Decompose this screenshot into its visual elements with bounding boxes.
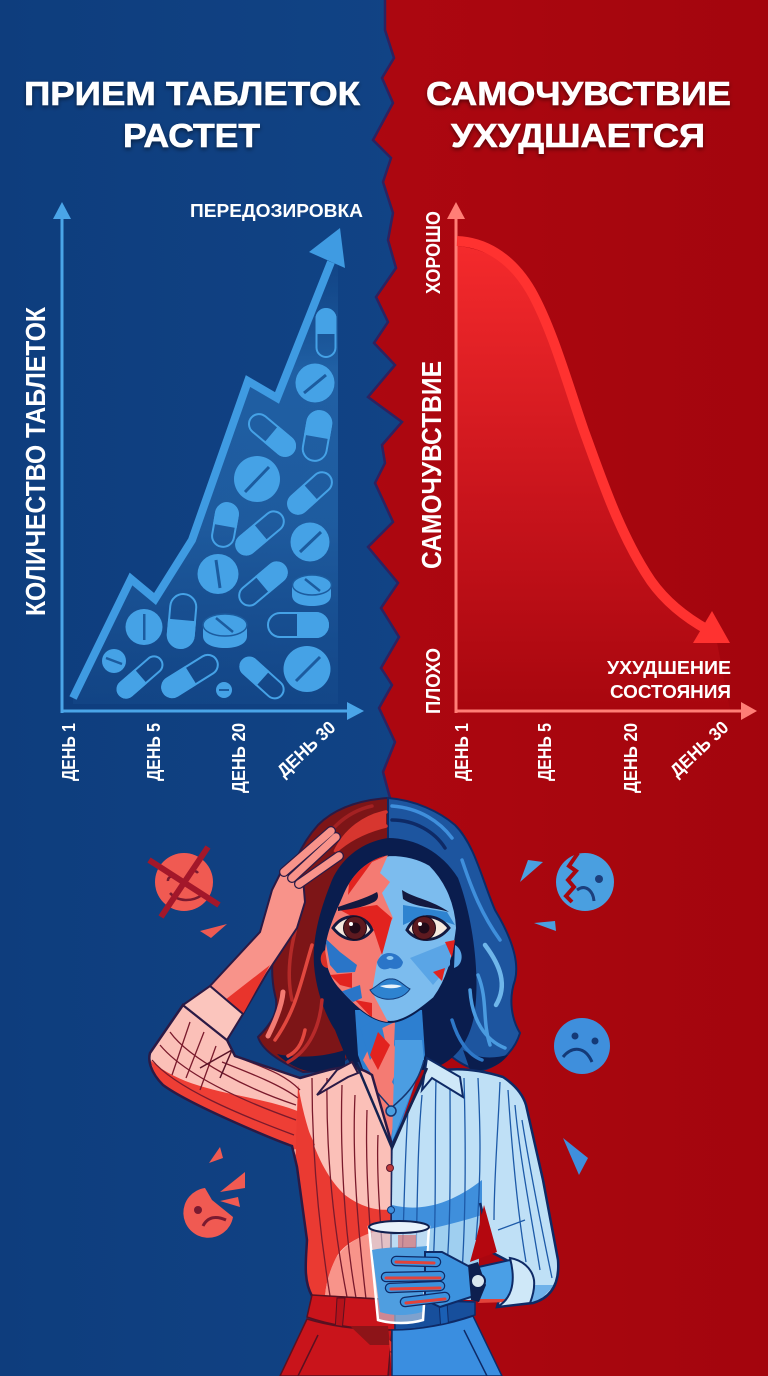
thick tablets	[203, 575, 332, 648]
trousers right	[392, 1316, 502, 1376]
background: red right half with jagged divider	[368, 0, 768, 1376]
hair strands	[268, 806, 505, 1062]
icon: triangle shard	[563, 1138, 588, 1175]
axes	[53, 202, 364, 720]
x axis labels	[59, 717, 339, 793]
icon: crossed out smiley	[149, 847, 219, 917]
chart: pills growth	[20, 201, 364, 793]
icon: broken angry face	[183, 1147, 245, 1238]
hair shadow around face	[314, 838, 476, 1070]
falling curve with arrow	[457, 241, 730, 643]
collar right	[422, 1058, 463, 1097]
title: right: САМОЧУВСТВИЕ	[426, 75, 731, 112]
pills group	[102, 309, 336, 702]
x axis labels: ДЕНЬ 20	[621, 723, 641, 793]
capsules	[114, 309, 336, 702]
raised hand and forearm	[210, 831, 339, 1014]
icon: sad face	[554, 1018, 610, 1074]
collar left	[317, 1062, 358, 1095]
axes	[447, 202, 757, 720]
necklace	[358, 1060, 424, 1116]
y axis label: good: ХОРОШО	[423, 211, 445, 294]
label: condition worsening: СОСТОЯНИЯ	[610, 682, 731, 702]
y axis label: number of pills: КОЛИЧЕСТВО ТАБЛЕТОК	[20, 306, 51, 616]
title: right	[426, 75, 731, 154]
wristwatch	[468, 1262, 486, 1302]
eye left	[333, 916, 372, 940]
shirt v-neck lines	[357, 1065, 427, 1148]
background: blue left half	[0, 0, 400, 1376]
mouth	[370, 979, 410, 999]
title: left: РАСТЕТ	[123, 117, 260, 154]
eyebrows	[338, 890, 449, 912]
face	[320, 855, 457, 1022]
label: condition worsening	[607, 658, 731, 702]
hand holding glass	[386, 1252, 474, 1307]
red flecks right	[445, 940, 455, 958]
shirt left half red	[149, 1005, 395, 1300]
illustration: woman split red and blue	[149, 798, 558, 1376]
hair back right	[388, 798, 520, 1070]
x axis labels	[452, 717, 732, 793]
title: right: УХУДШАЕТСЯ	[451, 117, 705, 154]
y axis label: bad: ПЛОХО	[423, 648, 445, 714]
x axis labels: ДЕНЬ 1	[452, 723, 472, 781]
icon: shards top right	[520, 860, 556, 931]
hair back left	[258, 798, 388, 1072]
nose	[377, 953, 403, 969]
earrings and left ear	[321, 945, 462, 968]
trousers left	[280, 1319, 403, 1376]
red bands	[340, 905, 392, 955]
shirt right half blue	[392, 1069, 558, 1310]
eye right	[407, 916, 449, 940]
x axis labels: ДЕНЬ 30	[666, 717, 732, 781]
rising line with arrow	[73, 228, 345, 698]
glass of water	[369, 1221, 429, 1323]
neck	[355, 1010, 425, 1150]
label: condition worsening: УХУДШЕНИЕ	[607, 658, 731, 678]
belt	[307, 1295, 475, 1332]
shirt cuff right	[497, 1258, 534, 1307]
label: overdose: ПЕРЕДОЗИРОВКА	[190, 201, 363, 221]
x axis labels: ДЕНЬ 1	[59, 723, 79, 781]
shirt cuff left	[183, 986, 243, 1040]
y axis label: wellbeing: САМОЧУВСТВИЕ	[416, 361, 447, 569]
blue shading right	[403, 905, 455, 925]
title: left: ПРИЕМ ТАБЛЕТОК	[24, 75, 361, 112]
x axis labels: ДЕНЬ 20	[229, 723, 249, 793]
tablets	[102, 364, 334, 698]
x axis labels: ДЕНЬ 30	[273, 717, 339, 781]
wrist and forearm right	[474, 1260, 517, 1303]
icon: shard	[200, 924, 227, 938]
icon: cracked sad face	[556, 853, 614, 911]
pink half	[320, 855, 393, 1022]
x axis labels: ДЕНЬ 5	[144, 723, 164, 781]
title: left	[24, 75, 361, 154]
area under curve	[457, 246, 730, 711]
placket and buttons	[386, 1145, 394, 1300]
area under pills line	[73, 256, 338, 704]
x axis labels: ДЕНЬ 5	[535, 723, 555, 781]
blue patches left	[325, 938, 357, 973]
hair lower lobes shadow	[277, 1050, 508, 1072]
chart: wellbeing decline	[416, 202, 757, 793]
